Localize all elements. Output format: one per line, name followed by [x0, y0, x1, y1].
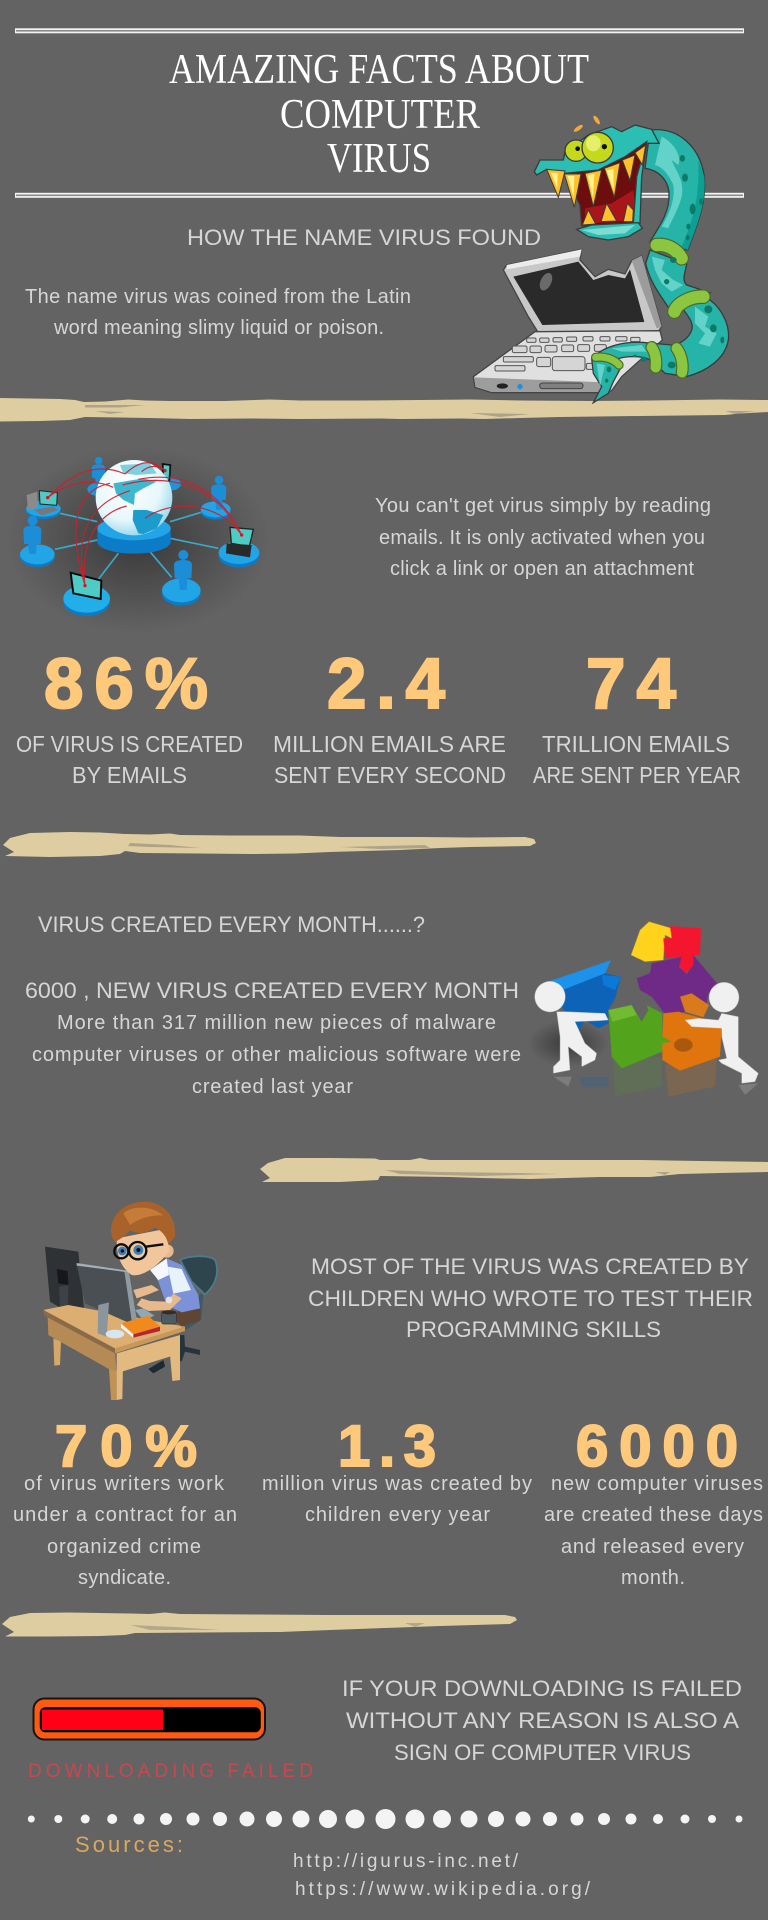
label: downloading failed: DOWNLOADING FAILED — [28, 1761, 313, 1782]
stat: 86% — [16, 645, 243, 788]
text block: 6000 new virus: More than 317 million new pieces of malware — [57, 1012, 496, 1034]
desk — [43, 1305, 185, 1400]
text block: download warning: IF YOUR DOWNLOADING IS FAILED — [342, 1676, 742, 1701]
title text — [169, 47, 589, 182]
boy legs and shoe — [148, 1307, 201, 1373]
heading: virus created every month: VIRUS CREATED EVERY MONTH......? — [38, 912, 425, 937]
illustration: global network — [7, 447, 270, 633]
stat label: OF VIRUS IS CREATED — [16, 731, 243, 757]
text block: created by children: MOST OF THE VIRUS WAS CREATED BY — [311, 1254, 749, 1279]
text block: download warning: SIGN OF COMPUTER VIRUS — [394, 1740, 691, 1765]
stat description: are created these days — [544, 1504, 763, 1526]
globe — [96, 460, 172, 535]
stat: 74 — [533, 645, 741, 788]
illustration: worm eating laptop — [473, 115, 729, 403]
text block: 6000 new virus — [25, 978, 521, 1098]
stat description: million virus was created by — [262, 1473, 532, 1495]
stat label: MILLION EMAILS ARE — [273, 731, 506, 757]
chair — [179, 1256, 217, 1362]
network disks — [20, 477, 259, 616]
text block: reading emails: You can't get virus simply by reading — [375, 495, 711, 517]
network hub base — [97, 516, 171, 554]
stat description — [262, 1473, 532, 1526]
stat: 74: 74 — [586, 645, 676, 724]
boy torso — [150, 1258, 200, 1312]
stat description: new computer viruses — [551, 1473, 763, 1495]
puzzle: orange piece — [662, 993, 722, 1071]
front monitor — [77, 1263, 137, 1337]
progress bar icon: downloading failed — [34, 1698, 265, 1740]
stat: 70%: 70% — [55, 1414, 197, 1479]
text block: name origin — [25, 286, 411, 339]
text block: reading emails — [375, 495, 711, 580]
stat: 2.4: 2.4 — [327, 645, 446, 724]
network links — [55, 512, 218, 579]
stat: 86%: 86% — [44, 645, 208, 724]
stat description: of virus writers work — [24, 1473, 225, 1495]
stat: 1.3 — [262, 1414, 532, 1526]
boy head — [111, 1202, 175, 1275]
divider brush stroke 4 — [2, 1612, 517, 1636]
puzzle: red piece — [663, 926, 701, 973]
title text: VIRUS — [327, 136, 431, 182]
left figure — [535, 981, 608, 1073]
keyboard — [135, 1308, 154, 1320]
sources links: http://igurus-inc.net/ — [293, 1851, 519, 1872]
stat description: and released every — [561, 1536, 744, 1558]
text block: name origin: word meaning slimy liquid or poison. — [53, 317, 384, 339]
worm body — [592, 130, 729, 403]
network people — [23, 457, 226, 590]
dotted separator — [28, 1809, 743, 1829]
stat: 6000 — [544, 1414, 763, 1589]
puzzle: blue piece — [548, 960, 621, 1032]
title text: COMPUTER — [280, 92, 480, 138]
text block: name origin: The name virus was coined from the Latin — [25, 286, 411, 308]
boy arms — [133, 1285, 182, 1311]
divider brush stroke 3 — [260, 1158, 768, 1182]
stat description: organized crime — [47, 1536, 201, 1558]
bar track — [40, 1708, 260, 1732]
network devices — [27, 464, 253, 599]
stat label: TRILLION EMAILS — [542, 731, 730, 757]
stat description — [13, 1473, 237, 1589]
bar fill — [42, 1710, 163, 1730]
stat description: under a contract for an — [13, 1504, 237, 1526]
stat label: BY EMAILS — [72, 762, 187, 788]
stat label — [16, 731, 243, 788]
sources heading: Sources: — [75, 1832, 183, 1857]
text block: created by children: PROGRAMMING SKILLS — [406, 1317, 661, 1342]
illustration: boy programming at desk — [43, 1202, 217, 1400]
text block: created by children: CHILDREN WHO WROTE TO TEST THEIR — [308, 1286, 753, 1311]
divider brush stroke 2 — [3, 832, 536, 857]
stat: 6000: 6000 — [576, 1414, 738, 1479]
stat: 2.4 — [273, 645, 506, 788]
worm spots — [605, 155, 724, 383]
stat description: month. — [621, 1567, 685, 1589]
text block: reading emails: click a link or open an attachment — [390, 558, 694, 580]
right figure — [685, 982, 758, 1083]
divider brush stroke 1 — [0, 398, 768, 422]
stat label — [533, 731, 741, 788]
stat description: syndicate. — [78, 1567, 171, 1589]
stat description: children every year — [305, 1504, 490, 1526]
text block: 6000 new virus: computer viruses or other malicious software were — [32, 1044, 521, 1066]
stat: 1.3: 1.3 — [338, 1414, 436, 1479]
text block: download warning: WITHOUT ANY REASON IS ALSO A — [346, 1708, 739, 1733]
title text: AMAZING FACTS ABOUT — [169, 47, 589, 93]
stat description — [544, 1473, 763, 1589]
sources links: https://www.wikipedia.org/ — [295, 1879, 591, 1900]
text block: download warning — [342, 1676, 742, 1765]
worm head — [534, 125, 659, 240]
worm eyes — [565, 115, 613, 163]
text block: created by children — [308, 1254, 753, 1342]
illustration: figures assembling puzzle — [528, 922, 758, 1097]
puzzle: green piece — [608, 1005, 672, 1068]
sources links — [293, 1851, 591, 1900]
text block: reading emails: emails. It is only activated when you — [379, 527, 705, 549]
heading: how the name virus found: HOW THE NAME VIRUS FOUND — [187, 225, 541, 250]
stat label: SENT EVERY SECOND — [274, 762, 506, 788]
stat: 70% — [13, 1414, 237, 1589]
text block: 6000 new virus: 6000 , NEW VIRUS CREATED EVERY MONTH — [25, 978, 519, 1003]
infection arcs — [48, 463, 242, 586]
stat label — [273, 731, 506, 788]
stat label: ARE SENT PER YEAR — [533, 762, 741, 788]
title block — [15, 28, 744, 198]
worm rings — [596, 245, 703, 372]
puzzle: yellow piece — [631, 922, 678, 962]
puzzle reflection — [553, 1057, 758, 1097]
desk items — [106, 1310, 176, 1338]
laptop — [473, 249, 662, 393]
text block: 6000 new virus: created last year — [192, 1076, 353, 1098]
puzzle: purple piece — [637, 955, 718, 1014]
back monitor — [45, 1247, 84, 1316]
